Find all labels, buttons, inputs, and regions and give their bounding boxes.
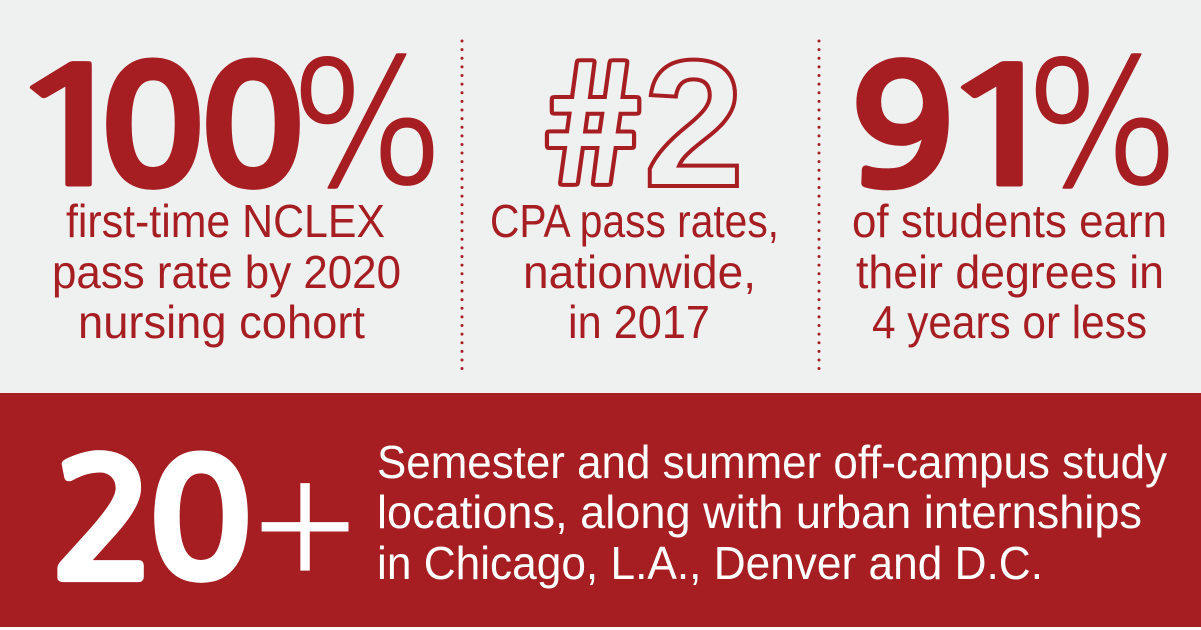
stat: 91 percent: 9	[849, 48, 956, 211]
stat: 100 percent	[0, 39, 453, 211]
banner text	[377, 436, 1167, 589]
stat: 100 percent: 0	[199, 48, 306, 211]
caption: nursing: nursing cohort	[78, 296, 365, 348]
stat: 20 plus	[50, 420, 360, 629]
stat: number 2 outline	[540, 23, 744, 225]
caption: nursing: pass rate by 2020	[52, 246, 401, 298]
stat: 100 percent: 0	[99, 48, 206, 211]
caption: nursing	[52, 195, 401, 348]
banner text: in Chicago, L.A., Denver and D.C.	[377, 537, 1043, 589]
caption: nursing: first-time NCLEX	[66, 195, 385, 247]
stat: number 2 outline: #	[540, 48, 645, 211]
background panel	[0, 0, 1201, 393]
stat: 91 percent: 1	[929, 48, 1079, 211]
stat: 100 percent: 1	[0, 48, 148, 211]
stat: 91 percent: %	[1016, 39, 1188, 211]
caption: graduation: of students earn	[852, 195, 1167, 247]
dotted dividers	[462, 41, 819, 375]
stat: number 2 outline: 2	[644, 23, 744, 225]
stat: 20 plus: +	[250, 420, 360, 629]
caption: CPA: nationwide,	[523, 246, 756, 298]
caption: CPA	[490, 195, 779, 348]
banner	[0, 393, 1201, 627]
stat: 100 percent: %	[281, 39, 453, 211]
caption: CPA: CPA pass rates,	[490, 195, 779, 247]
caption: graduation	[852, 195, 1167, 348]
stat: 20 plus: 0	[147, 441, 254, 604]
caption: graduation: 4 years or less	[872, 296, 1147, 348]
stat: 20 plus: 2	[50, 441, 157, 604]
stat: 91 percent	[849, 39, 1188, 211]
caption: graduation: their degrees in	[856, 246, 1164, 298]
banner text: locations, along with urban internships	[377, 486, 1142, 538]
caption: CPA: in 2017	[568, 296, 710, 348]
banner text: Semester and summer off-campus study	[377, 436, 1167, 488]
